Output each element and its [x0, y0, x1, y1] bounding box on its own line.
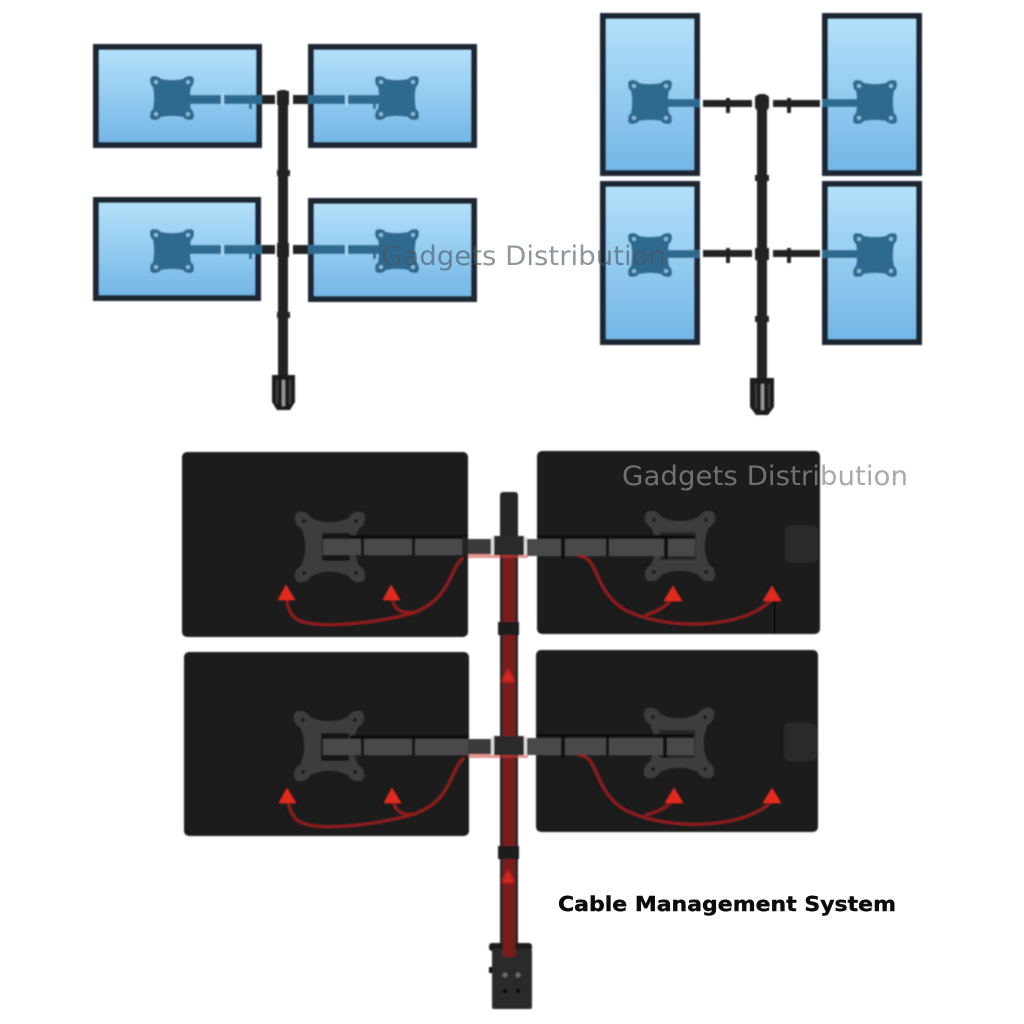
monitor rear: top right [527, 451, 820, 634]
monitor rear: top left [182, 452, 468, 637]
desk clamp base [489, 943, 532, 1009]
panel: portrait front view [603, 16, 919, 415]
caption: cable management system: Cable Management System [558, 892, 896, 916]
watermark: rear view: Gadgets Distribution [622, 461, 908, 492]
pole and arms [262, 90, 308, 378]
panel: rear view cable management [182, 451, 820, 1009]
panel: landscape front view [96, 47, 474, 410]
monitor: lower left portrait [603, 184, 700, 342]
watermark: centre: Gadgets Distribution [381, 241, 666, 272]
monitor: lower left landscape [96, 200, 262, 298]
monitor: top right portrait [822, 16, 919, 173]
pole and arms [703, 94, 820, 380]
monitor rear: lower right [527, 650, 818, 832]
monitor: lower right portrait [822, 184, 919, 342]
monitor: lower right landscape [308, 201, 474, 299]
desk clamp [272, 375, 295, 410]
monitor: top left landscape [96, 47, 262, 145]
pole with red cable channel [468, 492, 528, 947]
monitor rear: lower left [184, 652, 469, 836]
monitor: top left portrait [603, 16, 700, 173]
monitor: top right landscape [308, 47, 474, 145]
desk clamp [750, 378, 774, 415]
